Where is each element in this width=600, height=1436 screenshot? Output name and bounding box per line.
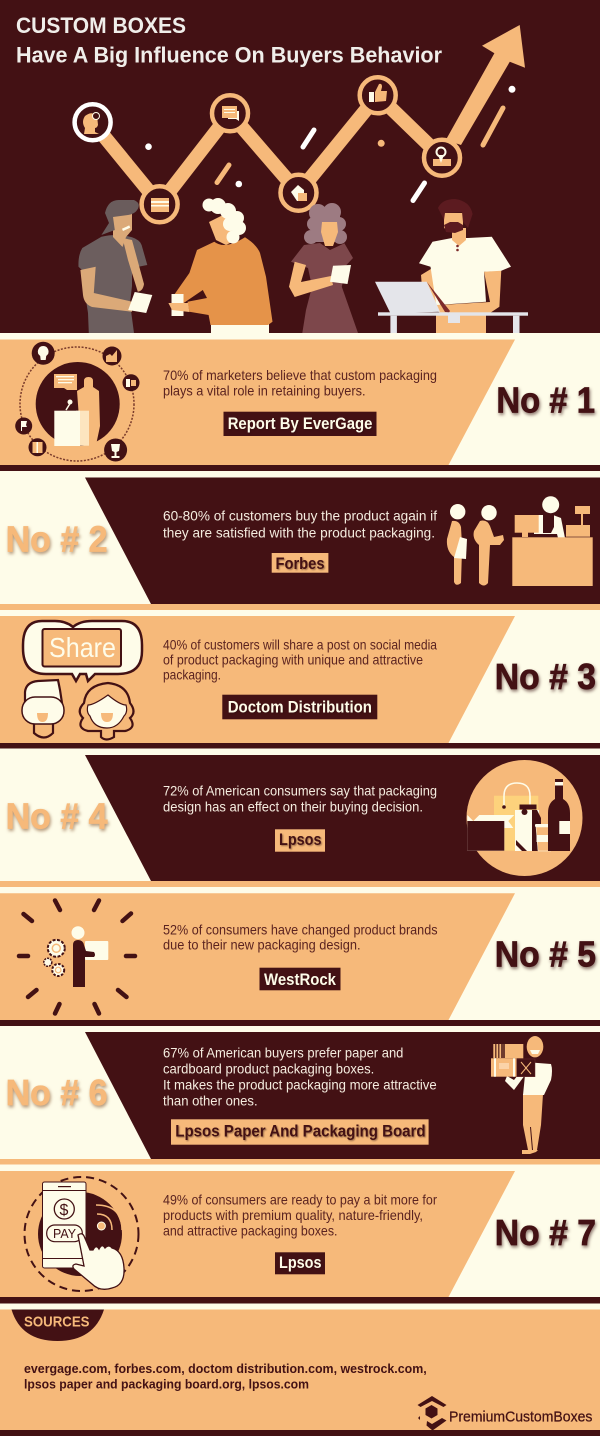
panel: No 6 xyxy=(0,1032,600,1164)
icon: two people sharing xyxy=(22,621,142,740)
text block: and attractive packaging boxes. xyxy=(163,1223,338,1238)
icon: hand with dots xyxy=(291,185,307,201)
source tag: Forbes xyxy=(276,555,324,573)
text block: packaging. xyxy=(163,667,221,682)
text block xyxy=(163,509,437,540)
hero panel xyxy=(0,0,600,333)
icon: thumbs up xyxy=(369,84,387,102)
text block: of product packaging with unique and attractive xyxy=(163,652,423,667)
icon: man holding boxes xyxy=(491,1036,552,1154)
title: CUSTOM BOXES xyxy=(16,13,186,38)
text block: 52% of consumers have changed product brands xyxy=(163,922,438,937)
person: bearded man at laptop xyxy=(375,199,528,333)
icon: presenter ring xyxy=(15,342,140,462)
icon: card xyxy=(151,198,169,212)
rising zigzag arrow xyxy=(75,25,525,222)
text block xyxy=(163,922,438,953)
text block: plays a vital role in retaining buyers. xyxy=(163,384,366,399)
text block: 70% of marketers believe that custom packaging xyxy=(163,368,437,383)
icon: chat xyxy=(222,106,239,121)
panel: No 7 xyxy=(0,1171,600,1304)
source list: lpsos paper and packaging board.org, lpsos.com xyxy=(24,1377,309,1392)
text block: cardboard product packaging boxes. xyxy=(163,1062,374,1077)
logo: PremiumCustomBoxes xyxy=(449,1409,592,1426)
logo xyxy=(418,1396,592,1430)
text block xyxy=(163,784,437,815)
rank label: No # 6 xyxy=(6,1072,108,1113)
rank label: No # 5 xyxy=(495,934,596,975)
source tag xyxy=(224,412,376,436)
sources badge xyxy=(12,1310,104,1341)
title: Have A Big Influence On Buyers Behavior xyxy=(16,42,442,68)
text block: they are satisfied with the product packaging. xyxy=(163,525,435,540)
source tag xyxy=(222,695,377,719)
rank label: No # 7 xyxy=(495,1212,596,1253)
text block: 72% of American consumers say that packaging xyxy=(163,784,437,799)
source tag xyxy=(171,1119,429,1145)
text block xyxy=(163,368,437,399)
text block: 67% of American buyers prefer paper and xyxy=(163,1046,403,1061)
text block: than other ones. xyxy=(163,1093,258,1108)
text block: due to their new packaging design. xyxy=(163,938,360,953)
sources badge: SOURCES xyxy=(24,1314,90,1331)
text block: 40% of customers will share a post on social media xyxy=(163,637,437,652)
text block: 60-80% of customers buy the product again if xyxy=(163,509,437,524)
panel: No 2 xyxy=(0,478,600,610)
source tag: Lpsos xyxy=(279,1254,322,1272)
person: thinking woman in gray xyxy=(78,200,152,333)
panel: No 1 xyxy=(0,340,600,471)
icon: phone payment tap xyxy=(24,1177,138,1291)
icon: phone payment tap: PAY xyxy=(53,1227,77,1241)
panel: sources xyxy=(0,1310,600,1436)
source list: evergage.com, forbes.com, doctom distribution.com, westrock.com, xyxy=(24,1361,427,1376)
title xyxy=(16,13,442,68)
text block xyxy=(163,1046,437,1108)
source tag: Report By EverGage xyxy=(228,415,372,433)
rank label: No # 3 xyxy=(495,656,596,697)
source tag: Doctom Distribution xyxy=(228,699,372,717)
text block xyxy=(163,637,437,682)
source list xyxy=(24,1361,427,1392)
panel: No 3 xyxy=(0,616,600,748)
text block: design has an effect on their buying decision. xyxy=(163,800,423,815)
icon: packaged products in circle xyxy=(466,760,582,876)
text block: 49% of consumers are ready to pay a bit more for xyxy=(163,1192,437,1207)
panel: No 4 xyxy=(0,755,600,887)
panel: No 5 xyxy=(0,893,600,1026)
icon: two people sharing: Share xyxy=(49,632,116,663)
rank label: No # 2 xyxy=(6,519,108,560)
text block xyxy=(163,1192,437,1238)
rank label: No # 4 xyxy=(6,795,108,836)
text block: products with premium quality, nature-friendly, xyxy=(163,1208,423,1223)
icon: person with gears and clock ticks xyxy=(19,900,135,1014)
source tag: WestRock xyxy=(264,971,337,989)
source tag: Lpsos xyxy=(279,831,322,849)
icon: map pin xyxy=(433,148,451,166)
text block: It makes the product packaging more attractive xyxy=(163,1078,437,1093)
person: woman in maroon dress xyxy=(289,203,358,333)
icon: head xyxy=(83,112,100,134)
source tag: Lpsos Paper And Packaging Board xyxy=(175,1123,426,1141)
decorative dots and dashes xyxy=(145,86,515,200)
person: man in orange sweater xyxy=(168,198,272,333)
icon: customers at checkout counter xyxy=(447,496,593,586)
icon: phone payment tap: $ xyxy=(60,1202,68,1219)
